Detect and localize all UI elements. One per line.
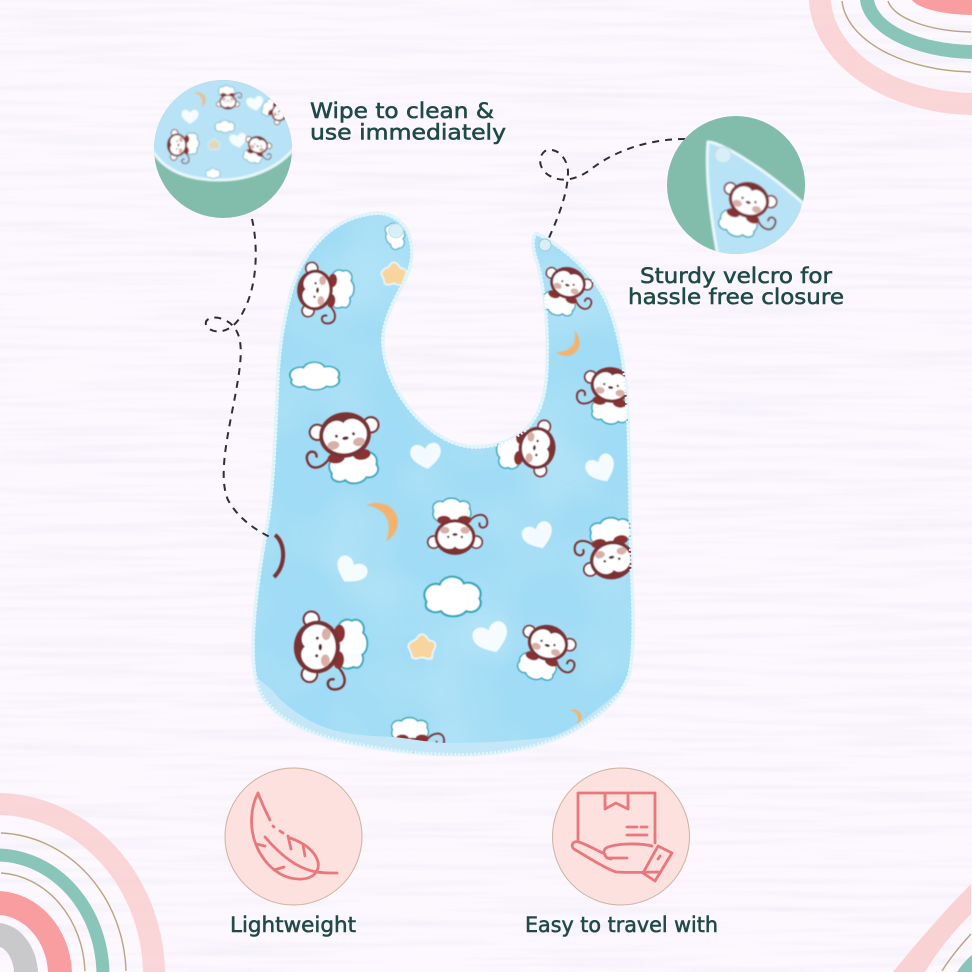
bib print: stars — [381, 262, 435, 659]
icon: feather — [225, 768, 362, 905]
caption: sturdy velcro — [628, 264, 844, 309]
dashed connector: wipe callout — [206, 219, 272, 538]
bib photo — [250, 210, 644, 772]
decorative rainbow: top right — [809, 0, 972, 115]
bib stitched edge — [253, 213, 633, 755]
bib print: partial monkey at seam — [274, 535, 283, 577]
detail circle: bib surface — [154, 80, 292, 218]
bib print: monkeys — [292, 261, 644, 772]
caption: sturdy velcro: Sturdy velcro for — [640, 264, 832, 288]
caption: wipe to clean — [310, 99, 506, 144]
decorative rainbow: bottom right — [893, 884, 972, 972]
bib print: hearts — [330, 442, 620, 658]
caption: lightweight: Lightweight — [230, 913, 356, 937]
bib print: moons — [366, 330, 584, 724]
bib bottom seam band — [256, 678, 622, 755]
detail circle: velcro — [667, 116, 805, 262]
velcro tab: left — [389, 224, 403, 238]
bib print: clouds — [290, 221, 481, 616]
decorative rainbow: bottom left — [0, 793, 165, 972]
caption: sturdy velcro: hassle free closure — [628, 285, 844, 309]
caption: wipe to clean: Wipe to clean & — [310, 99, 494, 123]
caption: wipe to clean: use immediately — [310, 120, 506, 144]
icon: box in hand — [552, 768, 690, 905]
dashed connector: velcro callout — [540, 139, 685, 240]
caption: easy to travel: Easy to travel with — [525, 913, 718, 937]
velcro tab: right — [539, 239, 551, 251]
